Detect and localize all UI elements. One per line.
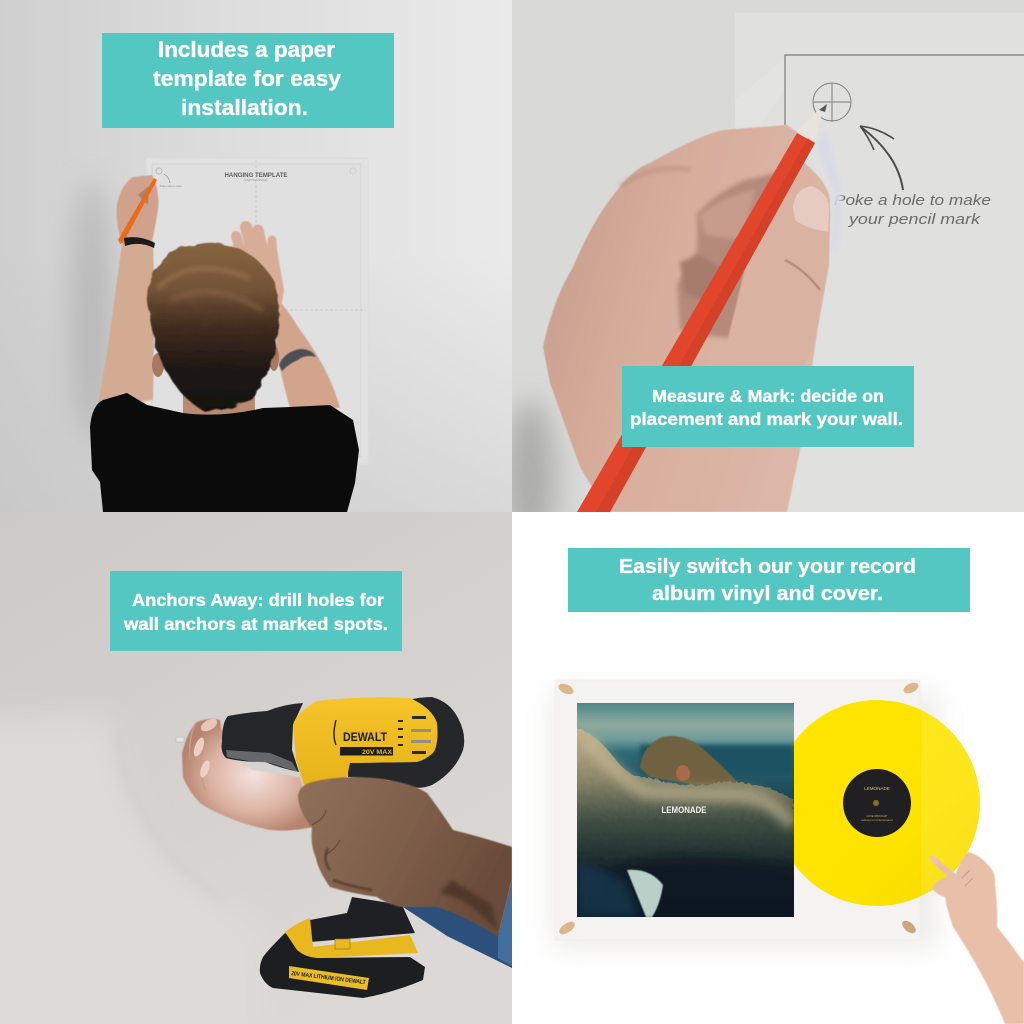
blue shirt sleeve xyxy=(403,880,512,968)
yellow vinyl record xyxy=(794,700,980,906)
step label: Anchors Away: drill holes for xyxy=(132,590,384,610)
braided head xyxy=(640,736,738,786)
battery pack xyxy=(260,918,425,998)
person: neck xyxy=(183,394,255,415)
paper template on wall xyxy=(146,158,368,464)
step label: wall anchors at marked spots. xyxy=(123,614,388,634)
person: arm with tattoo xyxy=(232,227,340,408)
feather xyxy=(627,870,663,917)
heading label: Easily switch our your record xyxy=(619,555,916,578)
drill rear black housing xyxy=(348,697,464,788)
wrist band xyxy=(124,237,155,248)
dewalt badge: DEWALT xyxy=(343,732,387,744)
drill handle xyxy=(310,897,415,942)
right hand gripping drill xyxy=(298,777,512,937)
wall anchor pin xyxy=(176,737,184,742)
hand pulling record xyxy=(929,852,1024,1024)
yellow vinyl record: LOVE DROUGHT xyxy=(867,814,888,818)
hand shadow on paper xyxy=(834,195,844,205)
step label: Measure & Mark: decide on xyxy=(652,386,884,406)
album cover xyxy=(570,703,800,925)
pencil mark note: Poke a hole to make xyxy=(834,192,991,209)
pencil mark note xyxy=(834,192,991,228)
heading label xyxy=(568,548,970,612)
drill chuck xyxy=(222,703,303,772)
paper template on wall: Poke a hole to make xyxy=(160,185,182,188)
left cupped hand xyxy=(182,716,313,831)
heading label: album vinyl and cover. xyxy=(652,582,883,605)
thumb xyxy=(728,206,831,339)
red pencil xyxy=(577,104,827,512)
panel: measure and mark xyxy=(504,0,1024,560)
step label: placement and mark your wall. xyxy=(630,409,903,429)
person: arm with pencil xyxy=(98,175,158,405)
heading label xyxy=(102,33,394,128)
heading label: installation. xyxy=(181,95,308,120)
vinyl centre label xyxy=(843,769,911,837)
battery label xyxy=(289,966,369,990)
gold standoffs xyxy=(557,681,920,937)
step label xyxy=(110,571,402,651)
fur coat xyxy=(570,727,800,925)
yellow vinyl record: PARKWOOD ENTERTAINMENT xyxy=(861,819,894,822)
album title: LEMONADE xyxy=(662,805,706,815)
step label xyxy=(622,366,914,447)
panel: drilling anchors xyxy=(0,512,512,1024)
dark water band xyxy=(640,745,794,775)
paper template on wall: HANGING TEMPLATE xyxy=(224,172,288,179)
paper sheet with crosshair xyxy=(735,54,1024,125)
hand holding pencil xyxy=(543,125,830,512)
battery label: 20V MAX LITHIUM ION DEWALT xyxy=(291,971,366,986)
heading label: template for easy xyxy=(153,66,342,91)
arm tattoo xyxy=(279,349,316,371)
acrylic frame xyxy=(555,680,920,940)
pencil mark note: your pencil mark xyxy=(848,211,982,228)
dewalt badge: 20V MAX xyxy=(362,749,393,756)
panel: switching record and cover xyxy=(548,548,1024,1024)
vents xyxy=(398,716,431,754)
person: head and hair xyxy=(147,243,279,411)
yellow vinyl record: LEMONADE xyxy=(864,786,890,791)
drill yellow body xyxy=(293,697,438,785)
finger gap xyxy=(676,172,774,340)
heading label: Includes a paper xyxy=(158,37,335,62)
torn wall patch xyxy=(0,722,174,974)
paper template on wall: HOW YOU INSTALL xyxy=(244,178,268,182)
person: black t-shirt xyxy=(90,393,359,512)
thumb nail xyxy=(793,186,829,232)
panel: hanging the paper template xyxy=(0,0,512,512)
drill xyxy=(222,697,464,788)
dewalt badge xyxy=(340,732,393,756)
frame shadow xyxy=(552,690,937,948)
orange pencil xyxy=(118,178,157,243)
handwritten arrow xyxy=(860,126,903,190)
